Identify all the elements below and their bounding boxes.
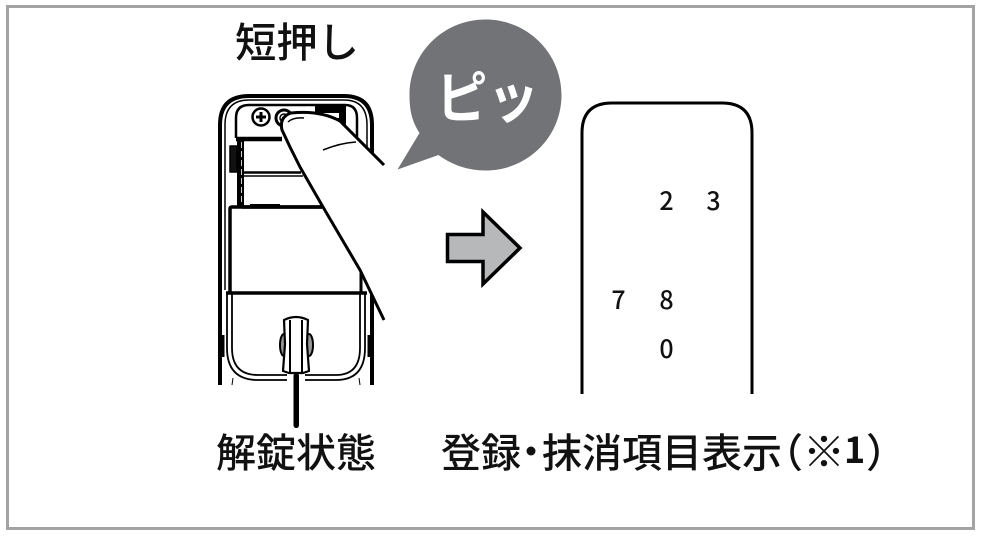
label: registration and deletion menu display: （ xyxy=(763,421,803,479)
keypad digit 7: 7 xyxy=(611,281,626,317)
keypad panel xyxy=(582,103,752,394)
speech bubble: beep xyxy=(398,20,562,170)
label: registration and deletion menu display xyxy=(441,419,906,480)
label: registration and deletion menu display: 抹消項目表示 xyxy=(542,421,782,479)
label: registration and deletion menu display: 登録 xyxy=(441,421,521,479)
lower cover xyxy=(226,207,367,385)
indicator line xyxy=(294,373,299,428)
label: registration and deletion menu display: 1 xyxy=(844,422,865,474)
finger xyxy=(282,113,385,322)
side notches xyxy=(223,335,369,357)
heading: short press: 短押し xyxy=(235,9,359,69)
beep text: ピッ xyxy=(436,54,539,135)
thumb turn xyxy=(280,317,313,373)
keypad digit 8: 8 xyxy=(659,281,674,317)
screw xyxy=(252,108,270,126)
battery compartment xyxy=(230,105,357,207)
label: unlocked state: 解錠状態 xyxy=(216,421,376,479)
lock device: unlocked state with finger xyxy=(220,96,385,385)
label: registration and deletion menu display: ※ xyxy=(803,419,845,480)
arrow xyxy=(448,212,520,284)
keypad digit 2: 2 xyxy=(659,182,674,218)
switch xyxy=(315,105,346,131)
keypad digit 0: 0 xyxy=(659,330,674,366)
reset button xyxy=(276,110,292,126)
device outer body xyxy=(220,96,372,385)
keypad digit 3: 3 xyxy=(706,182,721,218)
label: registration and deletion menu display: ） xyxy=(866,421,906,479)
